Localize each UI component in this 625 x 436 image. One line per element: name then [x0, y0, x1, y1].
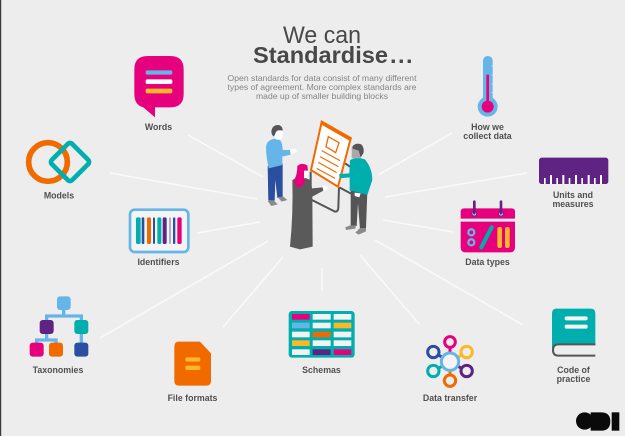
label: models: Models [44, 190, 74, 200]
label: practice: practice [557, 374, 590, 384]
label: taxonomies: Taxonomies [33, 365, 83, 375]
right column icons [461, 56, 608, 252]
intro paragraph [228, 73, 417, 101]
schemas and data transfer icons [289, 311, 472, 386]
label: measures: measures [552, 199, 594, 209]
icon: file [174, 342, 211, 386]
icon: ruler [539, 158, 608, 184]
label: collect data: collect data [463, 131, 512, 141]
easel stand [311, 172, 357, 212]
icon: speech bubble [134, 56, 184, 117]
label: identifiers: Identifiers [137, 257, 180, 267]
label: data transfer: Data transfer [423, 393, 478, 403]
title [253, 22, 414, 68]
intro paragraph: Open standards for data consist of many different [228, 73, 417, 83]
title: We can [283, 22, 361, 49]
icon: identifiers barcode [130, 210, 188, 252]
radiating lines [100, 133, 527, 338]
person left [266, 125, 297, 206]
code of practice and logo [552, 309, 619, 431]
logo: ODI [576, 412, 619, 431]
label: units and: Units and [553, 190, 593, 200]
icon: models [29, 142, 90, 182]
icon: taxonomy tree [30, 296, 88, 357]
title: Standardise [253, 42, 388, 68]
person right [335, 144, 372, 235]
intro paragraph: made up of smaller building blocks [256, 91, 389, 101]
central illustration: three people at a board [266, 120, 372, 249]
label: data types: Data types [465, 257, 510, 267]
label: code of: Code of [557, 365, 590, 375]
label: file formats: File formats [168, 393, 218, 403]
label: how we collect data: How we [471, 122, 504, 132]
words [29, 56, 188, 252]
label: schemas: Schemas [302, 365, 341, 375]
title: ... [390, 42, 414, 68]
icon: schema table [289, 311, 355, 358]
person centre [290, 164, 327, 249]
label: words: Words [145, 122, 172, 132]
icon: data transfer hub [428, 337, 472, 386]
board [311, 120, 352, 187]
icon: thermometer [478, 56, 498, 117]
taxonomy and file icons [30, 296, 211, 386]
icon: calendar [461, 202, 515, 252]
intro paragraph: types of agreement. More complex standards are [228, 82, 417, 92]
icon: book [552, 309, 595, 356]
